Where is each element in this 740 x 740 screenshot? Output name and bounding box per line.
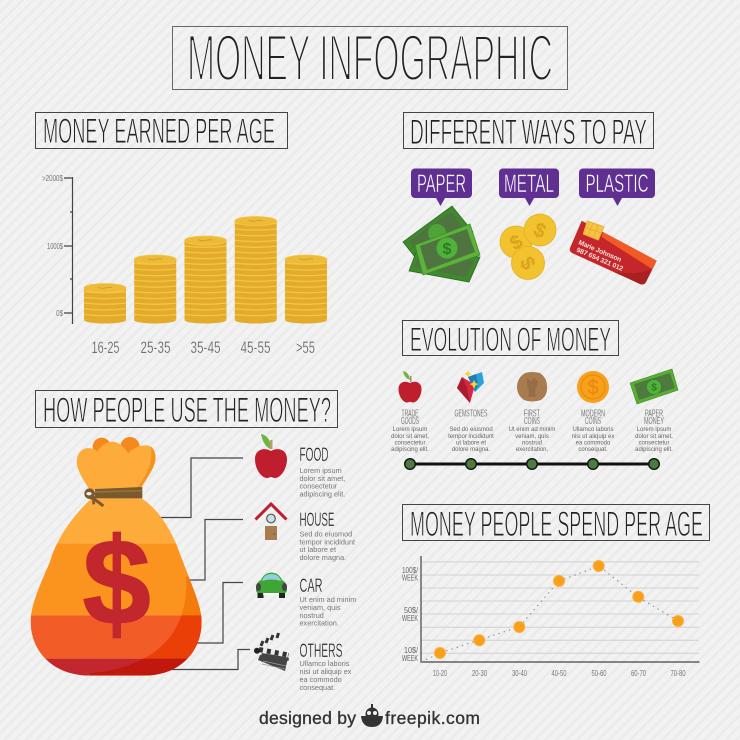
label: modern coins: nisi ut aliquip ex <box>572 434 614 440</box>
y axis labels: 10$/ <box>404 645 419 655</box>
text: others: ea commodo <box>300 675 342 684</box>
panel: different ways to pay <box>403 112 657 284</box>
icon: gemstones <box>457 371 484 403</box>
label: trade goods: Lorem ipsum <box>393 427 427 433</box>
text: car: nostrud <box>300 611 324 620</box>
x axis labels <box>433 669 686 678</box>
step: first coins <box>509 372 555 453</box>
panel: money earned per age <box>36 112 327 357</box>
heading: evolution of money <box>402 320 618 359</box>
footer credit <box>259 704 480 728</box>
icon: freepik logo <box>361 704 383 727</box>
icon: banknote: $ <box>651 382 657 394</box>
x axis labels: 16-25 <box>92 338 120 357</box>
x axis labels: 45-55 <box>240 338 270 357</box>
icon: paper money <box>403 206 480 282</box>
icon: clapperboard <box>254 633 289 671</box>
x axis labels: 40-50 <box>552 669 567 678</box>
bubble: metal <box>499 168 559 206</box>
text: house: ut labore et <box>300 545 336 554</box>
stack over 55 <box>285 255 327 324</box>
chart axis <box>42 174 72 324</box>
chart axis: 0$ <box>56 309 63 318</box>
label: trade goods <box>391 408 429 453</box>
icon: metal coins <box>500 214 556 280</box>
icon: plastic card <box>570 221 657 284</box>
bubble: plastic <box>579 168 655 206</box>
text: others: Ullamco laboris <box>300 659 350 668</box>
label: first coins <box>509 408 555 453</box>
label: food: FOOD <box>300 444 328 466</box>
bubble: metal: METAL <box>504 170 554 198</box>
label: others: OTHERS <box>300 640 342 662</box>
label: first coins: veniam, quis <box>515 434 549 440</box>
text: car: exercitation. <box>300 618 339 628</box>
label: first coins: FIRST <box>524 408 540 420</box>
heading: how people use the money: HOW PEOPLE USE THE MONEY? <box>43 391 331 430</box>
icon: plastic card: Marie Johnson <box>577 239 622 264</box>
text: others: nisi ut aliquip ex <box>300 667 352 676</box>
text: food <box>300 466 345 498</box>
y axis labels <box>402 565 419 663</box>
chart axis: >2000$ <box>42 174 63 183</box>
footer credit: freepik.com <box>385 708 480 728</box>
x axis labels: 70-80 <box>670 669 686 678</box>
label: trade goods: dolor sit amet, <box>391 434 429 440</box>
timeline <box>405 459 659 469</box>
x axis labels: 25-35 <box>140 338 170 357</box>
text: car: Ut enim ad minim <box>300 595 356 604</box>
heading: money earned per age <box>36 112 288 151</box>
icon: car <box>256 572 287 598</box>
label: modern coins <box>572 408 614 453</box>
text: food: dolor sit amet, <box>300 474 345 483</box>
text: house: tempor incididunt <box>300 538 355 546</box>
label: car: CAR <box>300 575 322 597</box>
x axis labels: 60-70 <box>631 669 646 678</box>
connector lines <box>161 458 250 670</box>
x axis labels: 50-60 <box>592 669 607 678</box>
x axis labels: 35-45 <box>190 338 220 357</box>
label: modern coins: MODERN <box>581 408 605 420</box>
label: house: HOUSE <box>300 509 334 531</box>
label: modern coins: COINS <box>585 416 601 427</box>
y axis labels: 100$/ <box>402 565 418 575</box>
label: first coins: exercitation. <box>516 447 549 453</box>
stack 45-55 <box>235 216 277 324</box>
bubble: plastic: PLASTIC <box>586 170 648 198</box>
label: modern coins: consequat. <box>578 447 608 453</box>
text: others <box>300 659 352 692</box>
label: trade goods: GOODS <box>401 416 419 427</box>
label: first coins: COINS <box>524 416 540 427</box>
icon: plastic card: 987 654 321 012 <box>575 247 624 273</box>
step: trade goods <box>391 371 429 453</box>
x axis labels <box>92 338 315 357</box>
panel: money people spend per age <box>402 504 710 678</box>
text: car <box>300 595 356 628</box>
text: house <box>300 530 355 562</box>
icon: paper money: $ <box>443 241 452 258</box>
icon: apple <box>398 371 422 403</box>
label: trade goods: consectetur <box>394 440 426 446</box>
label: first coins: Ut enim ad minim <box>509 427 555 433</box>
step: modern coins <box>572 371 614 453</box>
coin stacks <box>84 216 327 324</box>
icon: apple <box>255 434 287 478</box>
label: paper money: MONEY <box>644 416 664 427</box>
x axis labels: 20-30 <box>472 669 487 678</box>
stack 25-35 <box>134 255 176 324</box>
label: paper money <box>635 408 673 453</box>
x axis labels: 10-20 <box>433 669 447 678</box>
icon: money bag <box>30 437 202 676</box>
footer credit: designed by <box>259 708 356 728</box>
label: paper money: adipiscing elit. <box>635 447 673 453</box>
bubble: paper <box>411 168 472 206</box>
icon: metal coins: $ <box>530 219 549 243</box>
heading: how people use the money <box>36 390 338 430</box>
text: food: Lorem ipsum <box>300 466 342 475</box>
chart axis: 1000$ <box>47 242 63 251</box>
text: food: adipiscing elit. <box>300 490 345 498</box>
item: house <box>256 504 355 562</box>
label: gemstones: ut labore et <box>456 440 486 446</box>
y axis labels: 50$/ <box>404 605 419 615</box>
panel: how people use the money <box>20 390 356 692</box>
icon: metal coins: $ <box>506 231 527 255</box>
label: gemstones: dolore magna. <box>452 447 491 453</box>
step: paper money <box>630 369 678 453</box>
label: paper money: dolor sit amet, <box>635 434 673 440</box>
text: house: dolore magna. <box>300 553 346 562</box>
stack 35-45 <box>184 236 226 324</box>
icon: metal coins: $ <box>515 253 539 274</box>
label: gemstones: tempor incididunt <box>448 434 494 440</box>
icon: modern coin: $ <box>587 377 599 399</box>
label: gemstones <box>448 408 494 453</box>
x axis labels: >55 <box>296 338 315 357</box>
label: paper money: Lorem ipsum <box>637 427 671 433</box>
text: house: Sed do eiusmod <box>300 530 352 538</box>
icon: money bag: $ <box>83 514 151 650</box>
x axis labels: 30-40 <box>512 669 527 678</box>
title <box>172 20 568 94</box>
y axis labels: WEEK <box>402 653 418 663</box>
icon: house <box>256 504 286 540</box>
panel: evolution of money <box>391 320 678 469</box>
step: gemstones <box>448 371 494 453</box>
y axis labels: WEEK <box>402 613 418 623</box>
label: first coins: nostrud <box>522 440 542 446</box>
label: paper money: consectetur <box>638 440 670 446</box>
text: food: consectetur <box>300 482 338 490</box>
stack 16-25 <box>84 284 126 324</box>
item: car <box>256 572 356 628</box>
label: modern coins: ea commodo <box>576 440 611 446</box>
bubble: paper: PAPER <box>417 170 466 198</box>
line chart <box>402 556 700 678</box>
y axis labels: WEEK <box>402 572 418 582</box>
item: others <box>254 633 352 692</box>
label: trade goods: adipiscing elit. <box>391 447 429 453</box>
label: paper money: PAPER <box>645 408 663 420</box>
item: food <box>255 434 345 498</box>
text: others: consequat. <box>300 683 335 692</box>
heading: money earned per age: MONEY EARNED PER AGE <box>43 112 275 151</box>
label: gemstones: GEMSTONES <box>454 408 488 420</box>
label: gemstones: Sed do eiusmod <box>449 427 493 433</box>
label: trade goods: TRADE <box>402 408 419 420</box>
text: car: veniam, quis <box>300 603 341 612</box>
label: modern coins: Ullamco laboris <box>572 427 614 433</box>
data points <box>434 560 684 658</box>
icon: first coin <box>517 372 547 402</box>
